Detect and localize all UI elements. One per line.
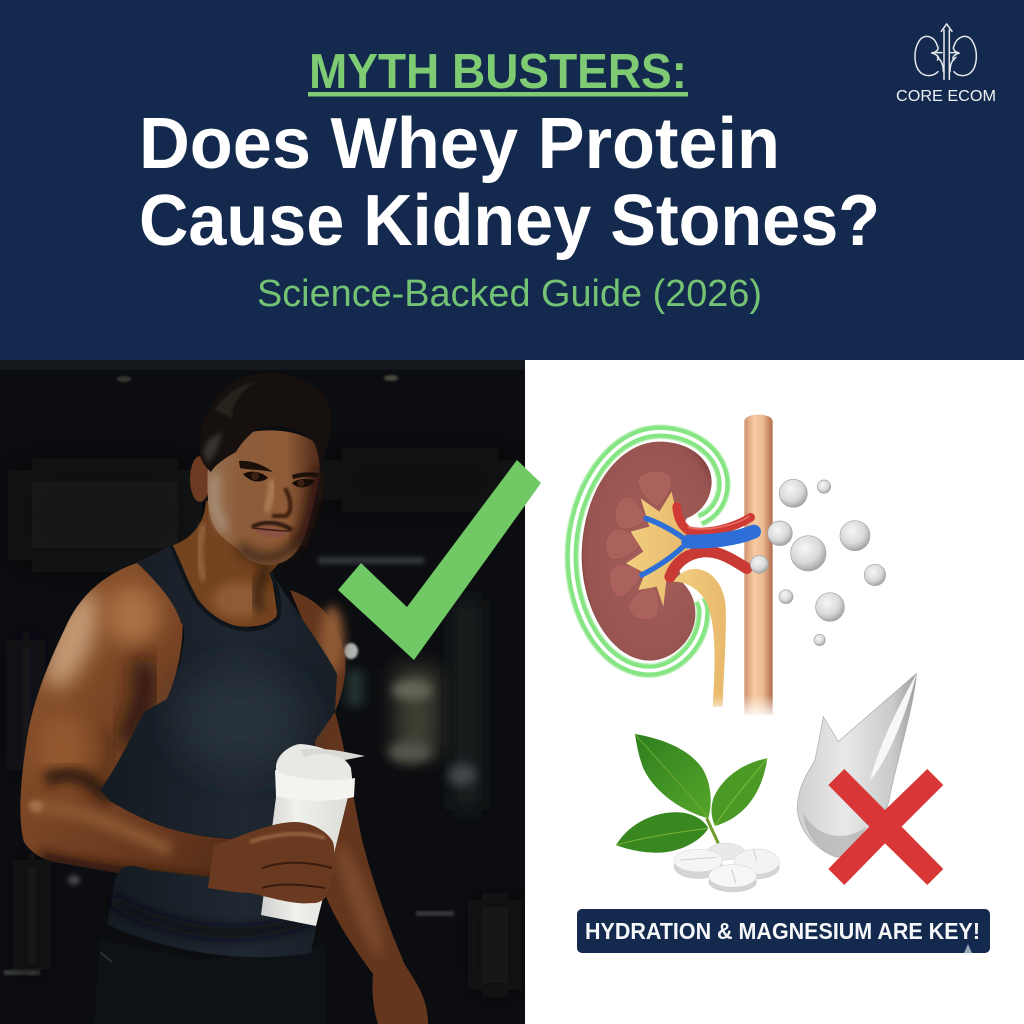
shaker bottle: [261, 744, 365, 926]
renal pelvis: [626, 492, 692, 607]
aorta tube: [744, 415, 773, 715]
blue vein: [642, 518, 754, 575]
protective green glow: [572, 432, 724, 671]
title: myth busters kicker: MYTH BUSTERS:: [309, 45, 687, 99]
icon: green check mark: [338, 460, 541, 660]
icon: red cross: [828, 769, 943, 885]
logo: core ecom kidney mark: [896, 24, 996, 105]
red arteries: [670, 507, 751, 577]
arm muscle shading: [28, 578, 210, 877]
main headline: Cause Kidney Stones?: [139, 181, 880, 261]
callout banner: HYDRATION & MAGNESIUM ARE KEY!: [585, 918, 980, 944]
mineral bubbles: [750, 479, 886, 646]
icon: silver spiked stone: [797, 673, 917, 857]
main headline: Does Whey Protein: [139, 104, 780, 184]
mouth: [252, 523, 292, 538]
ear: [190, 456, 210, 502]
hair: [200, 373, 331, 472]
kidney body: [582, 442, 712, 661]
neck and chest: [171, 500, 290, 627]
face: [207, 430, 320, 565]
right arm: [290, 590, 428, 1024]
subtitle: Science-Backed Guide (2026): [257, 273, 762, 315]
main headline: [139, 104, 880, 261]
gripping hand: [208, 822, 336, 903]
logo: core ecom kidney mark: CORE ECOM: [896, 88, 996, 105]
callout banner: [577, 909, 990, 953]
kidney diagram: [572, 415, 886, 718]
renal pyramids: [606, 471, 672, 620]
icon: green leaves: [616, 734, 767, 853]
header band: [0, 0, 1024, 360]
gym background bokeh: [0, 360, 525, 990]
panel: athlete photo illustration: [0, 360, 525, 1024]
arm silhouette: [20, 546, 232, 877]
icon: magnesium tablets: [674, 843, 779, 892]
ureter: [673, 569, 726, 707]
bottom icons: [616, 673, 943, 892]
eyes and brows: [239, 461, 319, 487]
panel: kidney illustration background: [525, 360, 1024, 1024]
athlete figure: [20, 373, 428, 1024]
tank top: [100, 546, 337, 957]
shorts: [94, 940, 327, 1024]
